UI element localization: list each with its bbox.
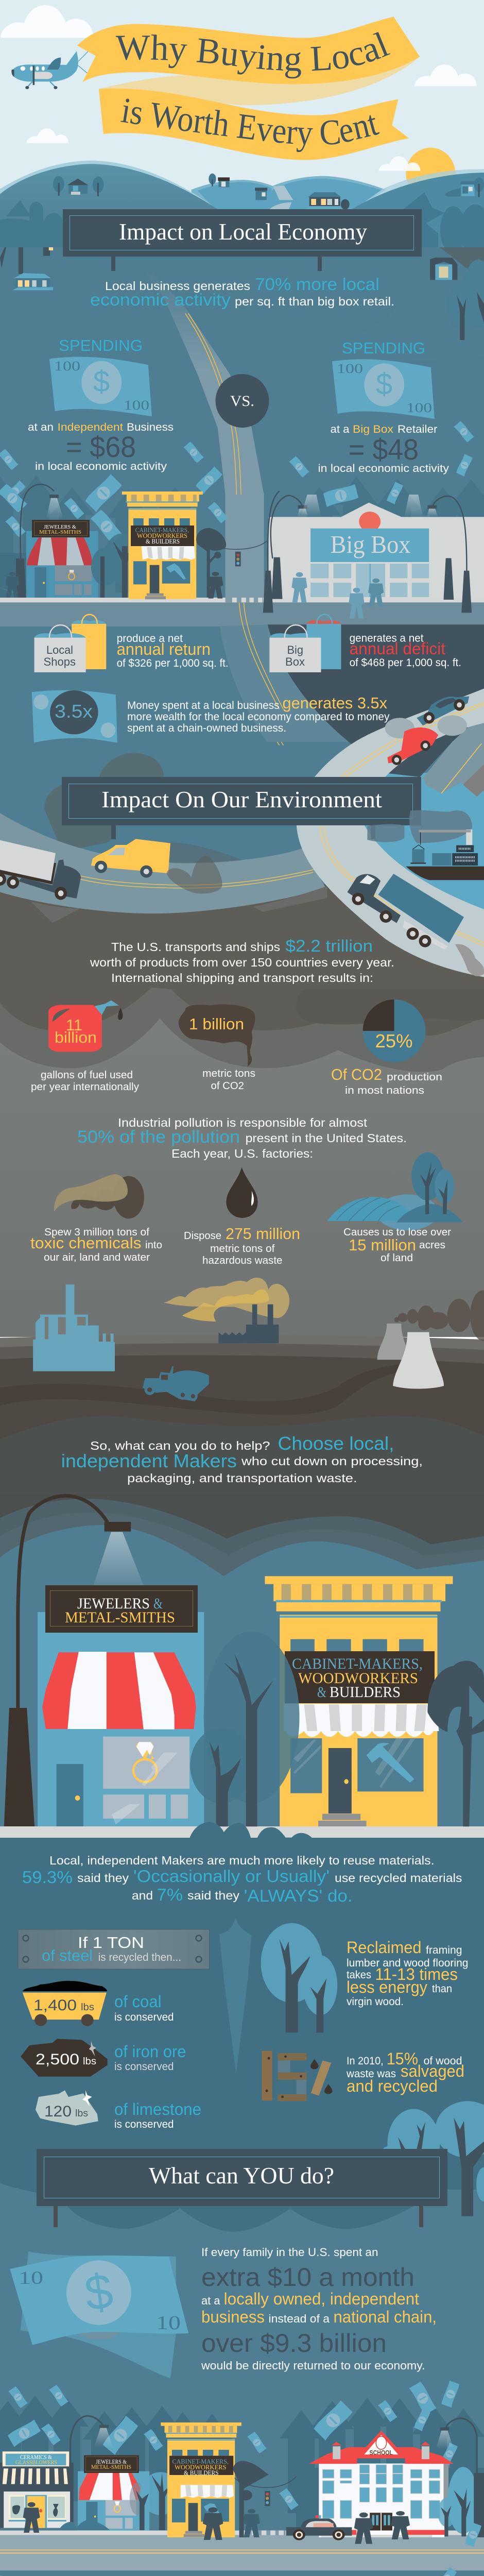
- icon: fuel can 11 billion: billion: [55, 1028, 97, 1046]
- icon: local shopping bags: [34, 615, 106, 672]
- text: gallons of fuel: per year internationally: [31, 1081, 140, 1093]
- icon: blue factory: [33, 1284, 115, 1371]
- sign: cabinet-makers large: BUILDERS: [330, 1684, 401, 1701]
- text: transport statistic: worth of products from over 150 countries every year.: [90, 956, 394, 969]
- text: metric tons of co2: metric tons: [202, 1067, 255, 1079]
- intro statistic: 70 percent: economic activity: [90, 290, 231, 309]
- text: makers reuse materials: 7%: [157, 1885, 183, 1904]
- polluted landscape ground bands: [0, 1335, 484, 1494]
- sky background: [0, 0, 484, 222]
- school building: SCHOOL: [370, 2449, 393, 2456]
- icon: smoke cloud 1 billion: 1 billion: [189, 1015, 244, 1033]
- text: toxic chemicals: our air, land and water: [44, 1251, 150, 1263]
- dollar bill with 3.5x: 3.5x: [55, 701, 93, 722]
- text: of co2 production: production: [387, 1071, 442, 1083]
- neighbourhood silhouettes bottom: [0, 2396, 484, 2535]
- icon: iron ore rock 2,500 lbs: 2,500: [36, 2051, 79, 2068]
- text: makers reuse materials: said they: [77, 1871, 129, 1885]
- dark arches behind shops: [0, 1416, 484, 1844]
- text: 15 million acres: of land: [381, 1252, 413, 1264]
- text: reclaimed lumber: lumber and wood flooring: [347, 1957, 469, 1969]
- school building: [309, 2431, 484, 2537]
- heading sign: impact on local economy: Impact on Local Economy: [119, 218, 367, 245]
- plaque: if 1 ton of steel: [18, 1929, 209, 1969]
- icon: local shopping bags: Local: [46, 643, 73, 656]
- text: extra 10 dollars a month: at a: [201, 2294, 220, 2307]
- layered smog background: [0, 984, 484, 1337]
- pine and reclaim trees: [219, 1917, 337, 2075]
- text: makers reuse materials: 'Occasionally or Usually': [133, 1867, 330, 1886]
- panel: spending at independent business: Business: [127, 421, 174, 433]
- sign: jewelers large: [45, 1585, 198, 1633]
- text: what can you do to help: Choose local,: [278, 1433, 394, 1454]
- icon: dollar bill left: 100: [124, 398, 149, 413]
- text: reclaimed lumber: takes: [347, 1969, 371, 1981]
- text: makers reuse materials: 59.3%: [22, 1868, 73, 1887]
- panel: spending at independent business: [28, 336, 174, 472]
- panel: spending at big box retailer: Retailer: [397, 423, 438, 435]
- text: of coal: [114, 1992, 174, 2023]
- text: of iron ore: is conserved: [114, 2061, 174, 2073]
- dollar bill with 3.5x: [32, 690, 117, 743]
- text: makers reuse materials: 'ALWAYS' do.: [244, 1886, 353, 1905]
- small shop: jewelers bottom: METAL-SMITHS: [91, 2463, 131, 2470]
- text: 15 percent wood waste: 15%: [387, 2049, 418, 2068]
- scalloped edge and trees near what can you do sign: [0, 2101, 484, 2232]
- text: of coal: is conserved: [114, 2011, 174, 2023]
- text: hazardous waste: hazardous waste: [202, 1255, 282, 1266]
- icon: cement mixer truck: [143, 1366, 209, 1401]
- text: extra 10 dollars a month: locally owned, independent: [224, 2290, 419, 2308]
- vs badge: VS.: [230, 393, 254, 410]
- text: 15 percent wood waste: [346, 2049, 464, 2095]
- small shop: cabinet-makers bottom: & BUILDERS: [184, 2469, 219, 2477]
- icon: oil drop: [226, 1167, 258, 1218]
- text: industrial pollution: [77, 1116, 407, 1160]
- icon: dollar bill left: [49, 357, 152, 416]
- text: reclaimed lumber: framing: [426, 1944, 462, 1956]
- text: makers reuse materials: [22, 1854, 462, 1905]
- text: extra 10 dollars a month: over $9.3 billion: [201, 2329, 387, 2358]
- text: extra 10 dollars a month: [201, 2246, 437, 2372]
- shop sign: jewelers small: METAL-SMITHS: [39, 529, 81, 535]
- small shop: cabinet-makers bottom: [161, 2422, 297, 2540]
- panel: spending at big box retailer: at a: [331, 423, 350, 435]
- pie chart: 25 percent: 25%: [375, 1030, 413, 1052]
- sign: jewelers large: METAL-SMITHS: [65, 1609, 175, 1626]
- text: 3.5x wealth: spent at a chain-owned business.: [127, 722, 286, 734]
- panel: big box annual deficit: of $468 per 1,000 sq. ft.: [350, 657, 461, 669]
- text: what can you do to help: who cut down on processing,: [241, 1454, 423, 1468]
- intro statistic: 70 percent: Local business generates: [105, 279, 250, 293]
- title text line 2: is Worth Every Cent: [120, 99, 380, 152]
- panel: spending at big box retailer: in local economic activity: [318, 462, 449, 474]
- text: reclaimed lumber: Reclaimed: [347, 1938, 421, 1957]
- text: 3.5x wealth: [127, 694, 390, 734]
- icon: big box shopping bags: Big: [287, 643, 303, 656]
- text: 15 percent wood waste: In 2010,: [347, 2055, 384, 2067]
- panel: local shops annual return: of $326 per 1,000 sq. ft.: [117, 657, 229, 669]
- icon: airplane: [11, 51, 88, 89]
- sign: cabinet-makers large: CABINET-MAKERS,: [292, 1655, 423, 1672]
- cars on road with smoke: [385, 697, 469, 765]
- text: toxic chemicals: into: [145, 1239, 162, 1251]
- sign: jewelers large: JEWELERS: [77, 1595, 150, 1612]
- text: extra 10 dollars a month: extra $10 a month: [201, 2263, 414, 2292]
- icon: large ten dollar bill: 10: [156, 2312, 181, 2334]
- shop sign: cabinet makers small: CABINET-MAKERS,: [135, 526, 189, 534]
- intro statistic: 70 percent: 70% more local: [255, 275, 379, 294]
- text: transport statistic: The U.S. transports and ships: [111, 940, 280, 954]
- text: gallons of fuel: gallons of fuel used: [41, 1069, 133, 1081]
- icon: large ten dollar bill: 10: [19, 2267, 43, 2288]
- text: extra 10 dollars a month: national chain,: [334, 2308, 437, 2326]
- text: metric tons of co2: of CO2: [211, 1080, 244, 1092]
- large shop: cabinet-makers, woodworkers and builders: [265, 1576, 453, 1826]
- text: makers reuse materials: and: [132, 1889, 153, 1902]
- intro statistic: 70 percent: [90, 275, 394, 309]
- text: 3.5x wealth: generates 3.5x: [282, 694, 387, 712]
- text: hazardous waste: Dispose: [184, 1230, 221, 1242]
- small shop: ceramics and glassblowers: [0, 2451, 74, 2533]
- heading sign: impact on our environment: Impact On Our Environment: [101, 786, 382, 812]
- icon: large ten dollar bill: [10, 2251, 188, 2379]
- text: hazardous waste: metric tons of: [210, 1243, 275, 1255]
- text: 15 percent wood waste: and recycled: [347, 2077, 438, 2095]
- icon: greenhouses and trees: [327, 1153, 463, 1230]
- icon: dollar bill right: [332, 359, 435, 419]
- icon: large ten dollar bill: $: [81, 2263, 116, 2321]
- icon: coal cart 1,400 lbs: lbs: [81, 2002, 94, 2013]
- text: metric tons of co2: [202, 1067, 255, 1092]
- neighbourhood silhouettes behind shops: [0, 476, 484, 592]
- icon: dollar bill right: $: [376, 367, 392, 401]
- text: hazardous waste: [184, 1225, 300, 1266]
- text: what can you do to help: packaging, and transportation waste.: [127, 1471, 357, 1485]
- text: industrial pollution: 50% of the pollution: [77, 1127, 240, 1147]
- text: 3.5x wealth: more wealth for the local economy compared to money: [127, 710, 390, 723]
- text: what can you do to help: So, what can you do to help?: [90, 1439, 270, 1452]
- icon: wood plank 15 percent: [262, 2051, 333, 2101]
- text: of co2 production: [331, 1065, 442, 1096]
- text: of co2 production: in most nations: [345, 1084, 424, 1096]
- text: reclaimed lumber: virgin wood.: [347, 1996, 404, 2008]
- sign: cabinet-makers large: &: [317, 1684, 326, 1701]
- small shop: cabinet-makers bottom: CABINET-MAKERS,: [172, 2458, 229, 2465]
- text: reclaimed lumber: less energy: [347, 1978, 427, 1996]
- pie chart: 25 percent: [363, 999, 426, 1062]
- text: transport statistic: $2.2 trillion: [285, 937, 373, 955]
- icon: dollar bill right: 100: [406, 400, 432, 415]
- falling money: [0, 421, 474, 544]
- vs badge: [215, 374, 269, 428]
- main road: [145, 273, 283, 745]
- icon: limestone rock 120 lbs: lbs: [75, 2108, 88, 2119]
- text: makers reuse materials: said they: [187, 1889, 240, 1902]
- heading sign: what can you do: What can YOU do?: [149, 2162, 334, 2189]
- panel: big box annual deficit: generates a net: [350, 633, 424, 645]
- small shop: ceramics and glassblowers: GLASSBLOWERS: [15, 2459, 57, 2466]
- sign: cabinet-makers large: [285, 1651, 435, 1703]
- panel: local shops annual return: [34, 615, 229, 672]
- icon: cooling towers with smoke: [377, 1290, 484, 1389]
- shop sign: jewelers small: JEWELERS &: [44, 524, 76, 530]
- text: 15 million acres: [343, 1226, 451, 1264]
- icon: smoke cloud 1 billion: [179, 1004, 255, 1067]
- text: makers reuse materials: use recycled materials: [335, 1871, 462, 1885]
- text: 15 million acres: 15 million: [349, 1236, 416, 1254]
- icon: toxic smoke: [54, 1174, 144, 1218]
- heading sign: impact on local economy: [63, 209, 422, 271]
- text: makers reuse materials: Local, independent Makers are much more likely to reuse materials.: [49, 1854, 435, 1867]
- heading sign: impact on our environment: [62, 777, 421, 839]
- text: of coal: of coal: [114, 1992, 162, 2011]
- text: 15 percent wood waste: salvaged: [401, 2062, 464, 2080]
- icon: iron ore rock 2,500 lbs: [21, 2039, 108, 2077]
- text: hazardous waste: 275 million: [226, 1225, 300, 1243]
- panel: local shops annual return: annual return: [117, 640, 211, 658]
- text: transport statistic: International shipping and transport results in:: [111, 971, 373, 985]
- icon: coal cart 1,400 lbs: 1,400: [33, 1997, 77, 2014]
- panel: spending at independent business: at an: [28, 421, 54, 433]
- text: what can you do to help: independent Makers: [61, 1450, 237, 1471]
- icon: dollar bill left: 100: [54, 359, 80, 374]
- plaque: if 1 ton of steel: If 1 TON: [78, 1934, 144, 1952]
- heading sign: what can you do: [37, 2149, 447, 2227]
- text: of iron ore: [114, 2042, 186, 2073]
- shop sign: cabinet makers small: [131, 526, 194, 546]
- panel: big box annual deficit: annual deficit: [350, 639, 445, 658]
- text: 15 percent wood waste: of wood: [423, 2055, 462, 2067]
- icon: iron ore rock 2,500 lbs: lbs: [83, 2056, 96, 2067]
- road and dusk ground for shop street: [0, 495, 484, 742]
- text: extra 10 dollars a month: would be directly returned to our economy.: [201, 2359, 425, 2372]
- text: 15 million acres: Causes us to lose over: [343, 1226, 451, 1238]
- panel: spending at big box retailer: [318, 339, 449, 474]
- text: industrial pollution: Industrial pollution is responsible for almost: [118, 1116, 368, 1129]
- text: 3.5x wealth: Money spent at a local business: [127, 699, 279, 711]
- small shop: cabinet-makers bottom: WOODWORKERS: [175, 2464, 227, 2471]
- falling money bottom: [7, 2381, 460, 2465]
- money on street: [279, 2488, 482, 2576]
- panel: spending at big box retailer: SPENDING: [342, 339, 425, 357]
- icon: limestone rock 120 lbs: 120: [44, 2103, 72, 2120]
- vehicles, ship and smoke on environment road: [0, 810, 484, 976]
- shop sign: cabinet makers small: WOODWORKERS: [137, 532, 187, 539]
- police car and pedestrians: [286, 2511, 410, 2544]
- environment road network, water and ground: [0, 689, 484, 999]
- background hill, houses and trees beside intro text: [0, 247, 484, 367]
- text: toxic chemicals: Spew 3 million tons of: [44, 1226, 149, 1238]
- sky scene: sun, clouds, hills: [0, 5, 484, 256]
- trees between large shops: [190, 1632, 484, 1855]
- text: extra 10 dollars a month: instead of a: [269, 2312, 330, 2325]
- icon: yellow smoke factory: [164, 1278, 289, 1343]
- shop sign: cabinet makers small: & BUILDERS: [146, 537, 180, 545]
- icon: limestone rock 120 lbs: [36, 2090, 98, 2126]
- icon: fuel can 11 billion: [48, 1001, 123, 1052]
- intro statistic: 70 percent: per sq. ft than big box retail.: [235, 295, 394, 308]
- text: 15 percent wood waste: waste was: [346, 2068, 396, 2080]
- panel: local shops street: [6, 484, 267, 599]
- text: extra 10 dollars a month: business: [201, 2308, 265, 2326]
- icon: dollar bill left: $: [93, 365, 110, 398]
- icon: fuel can 11 billion: 11: [66, 1016, 82, 1034]
- street lamps bottom: [71, 2416, 477, 2483]
- bottom forest: [0, 2574, 484, 2576]
- panel: big box annual deficit: [269, 615, 461, 672]
- sign: jewelers large: &: [153, 1595, 163, 1612]
- plaque: if 1 ton of steel: of steel: [42, 1946, 93, 1964]
- panel: big box store: Big Box: [331, 530, 411, 558]
- shop sign: jewelers small: [32, 520, 90, 537]
- title banner: [77, 16, 420, 160]
- panel: spending at independent business: in local economic activity: [35, 460, 167, 472]
- title text line 1: Why Buying Local: [115, 32, 390, 78]
- panel: town street bottom: [0, 2416, 484, 2576]
- text: industrial pollution: present in the United States.: [246, 1131, 407, 1145]
- panel: spending at big box retailer: = $48: [349, 433, 419, 466]
- teal background upper: [0, 209, 484, 930]
- text: of limestone: of limestone: [114, 2100, 201, 2119]
- small shop: jewelers bottom: JEWELERS &: [96, 2458, 127, 2465]
- text: extra 10 dollars a month: If every family in the U.S. spent an: [201, 2246, 378, 2259]
- text: reclaimed lumber: 11-13 times: [375, 1965, 458, 1984]
- text: toxic chemicals: toxic chemicals: [30, 1234, 142, 1252]
- panel: spending at independent business: Independent: [58, 421, 123, 433]
- text: industrial pollution: Each year, U.S. factories:: [171, 1147, 313, 1160]
- icon: big box shopping bags: [269, 615, 341, 672]
- icon: street lamp: [4, 1496, 148, 1826]
- plaque: if 1 ton of steel: is recycled then...: [98, 1952, 181, 1963]
- sign: cabinet-makers large: WOODWORKERS: [298, 1670, 418, 1687]
- text: toxic chemicals: [30, 1226, 162, 1263]
- sidewalk and teal lower background: [0, 1826, 484, 2576]
- text: of co2 production: Of CO2: [331, 1065, 382, 1083]
- icon: local shopping bags: Shops: [43, 655, 76, 668]
- text: reclaimed lumber: [347, 1938, 469, 2008]
- text: of limestone: [114, 2100, 201, 2130]
- panel: spending at big box retailer: Big Box: [353, 423, 393, 435]
- text: transport statistic: [90, 937, 394, 985]
- icon: coal cart 1,400 lbs: [23, 1981, 107, 2026]
- road bottom: [0, 2531, 484, 2570]
- text: 15 million acres: acres: [419, 1239, 445, 1251]
- small shop: ceramics and glassblowers: CERAMICS &: [20, 2453, 53, 2461]
- panel: spending at independent business: SPENDING: [59, 336, 143, 354]
- text: what can you do to help: [61, 1433, 423, 1485]
- text: of limestone: is conserved: [114, 2119, 174, 2130]
- icon: big box shopping bags: Box: [285, 655, 305, 668]
- small shop: jewelers bottom: [59, 2455, 181, 2531]
- village houses and trees on hills: [53, 174, 484, 210]
- icon: dollar bill right: 100: [337, 361, 363, 376]
- text: reclaimed lumber: than: [432, 1983, 452, 1995]
- text: of iron ore: of iron ore: [114, 2042, 186, 2061]
- large shop: jewelers and metal-smiths: [38, 1585, 204, 1826]
- text: gallons of fuel: [31, 1069, 140, 1093]
- panel: spending at independent business: = $68: [66, 431, 136, 464]
- panel: big box store: [263, 491, 484, 619]
- panel: local shops annual return: produce a net: [117, 633, 183, 645]
